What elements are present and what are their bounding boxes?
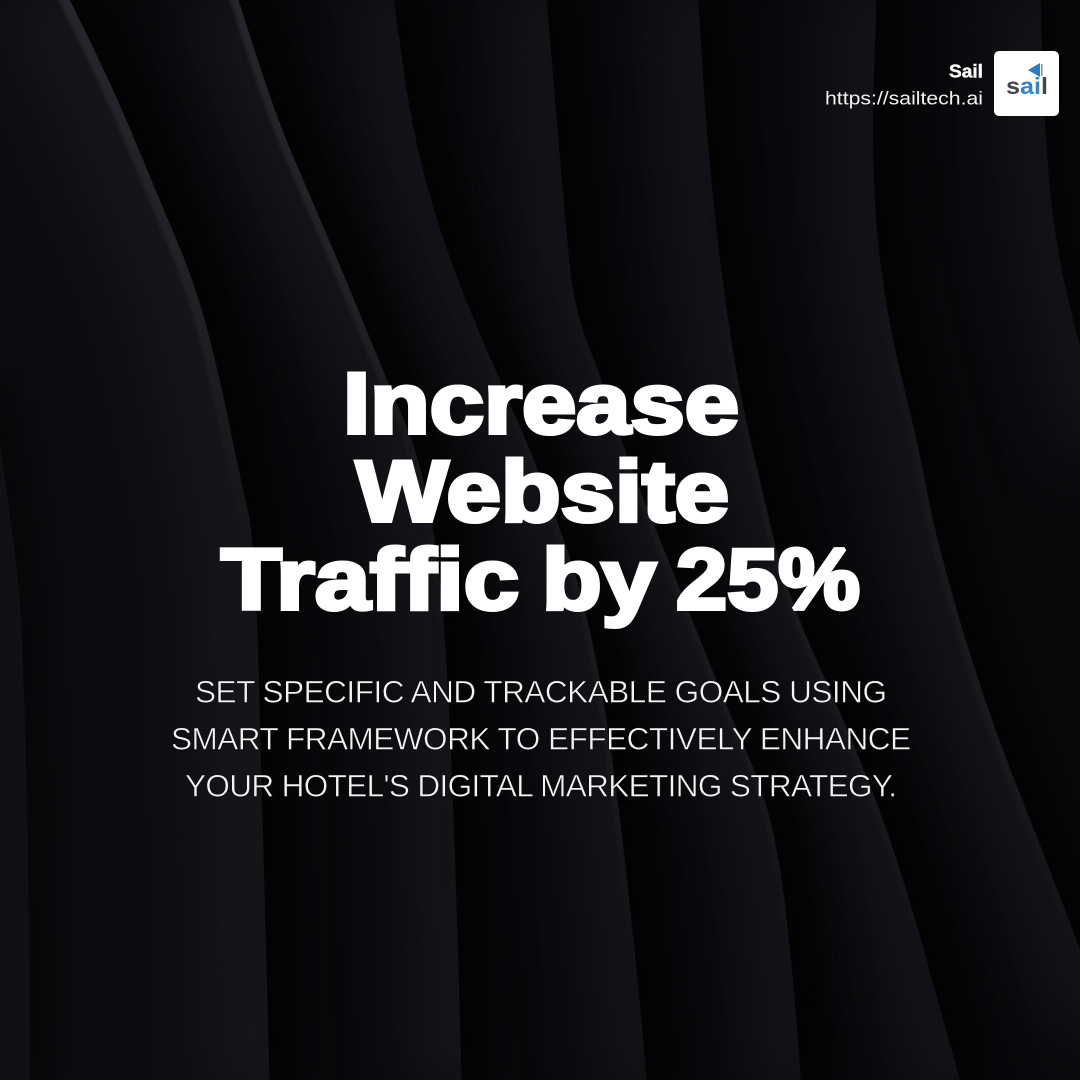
fold 6 <box>839 1 1080 1008</box>
subtitle text block <box>171 674 911 804</box>
title line 2: Website <box>356 444 729 540</box>
title line 3: 25% <box>676 532 860 628</box>
fold 3 <box>366 2 646 1079</box>
subtitle line 3: YOUR HOTEL'S DIGITAL MARKETING STRATEGY. <box>185 768 897 804</box>
brand block: name and URL <box>825 62 983 108</box>
title line 3: by <box>542 532 656 628</box>
brand name: Sail <box>949 62 983 82</box>
logo wordmark: sail <box>1006 73 1048 99</box>
fold 7 <box>1013 0 1080 420</box>
brand URL: https://sailtech.ai <box>825 88 983 108</box>
fold 4 <box>517 2 800 1079</box>
subtitle line 1: SET SPECIFIC AND TRACKABLE GOALS USING <box>195 674 887 710</box>
subtitle line 2: SMART FRAMEWORK TO EFFECTIVELY ENHANCE <box>171 720 911 756</box>
fold 5 <box>668 2 960 1080</box>
fold 1 <box>0 0 270 1080</box>
fold 0 <box>0 380 30 1080</box>
icon: blue sail flag <box>1028 63 1042 77</box>
title line 1: Increase <box>343 356 739 452</box>
logo: sail <box>994 51 1059 116</box>
fold 2 <box>206 0 461 1080</box>
title line 3: Traffic <box>221 532 519 628</box>
title <box>221 356 860 628</box>
